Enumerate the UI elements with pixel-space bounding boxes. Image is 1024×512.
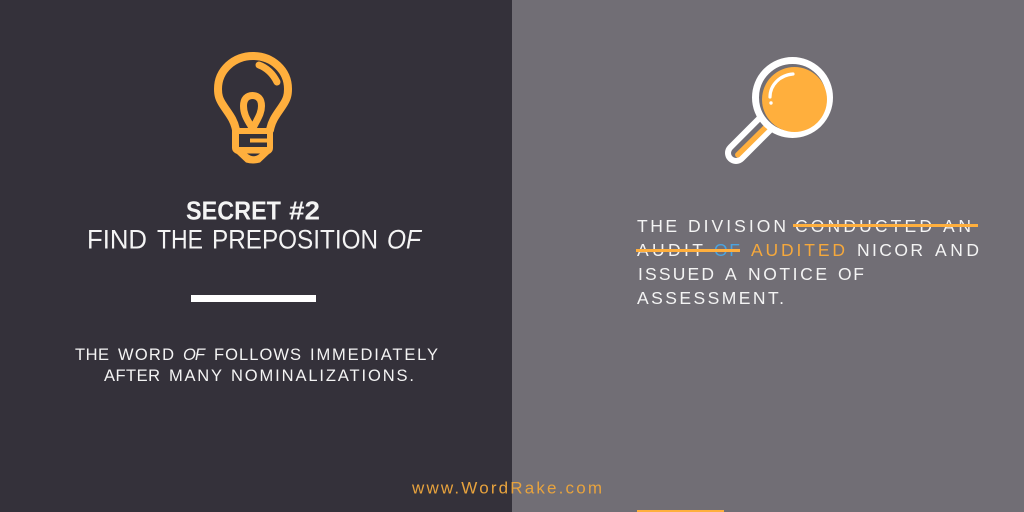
text block: example sentence with edits [637,216,979,308]
text block: example sentence with edits: ISSUED [638,264,714,284]
heading: find the preposition of: PREPOSITION [212,224,378,254]
text block: explanation: OF [183,346,206,364]
text block: explanation [75,346,438,385]
strikethrough: audit of [636,249,740,252]
heading: secret number: #2 [289,196,320,226]
heading: secret number: SECRET [186,196,281,226]
text block: example sentence with edits: THE [637,216,677,236]
text block: example sentence with edits: OF [838,264,864,284]
heading: find the preposition of [87,224,422,254]
text block: explanation: WORD [118,346,174,364]
text block: explanation: THE [75,346,109,364]
text block: explanation: IMMEDIATELY [310,346,438,364]
text block: example sentence with edits: OF [714,240,740,260]
text block: example sentence with edits: CONDUCTED [795,216,932,236]
heading: find the preposition of: THE [157,224,203,254]
text block: example sentence with edits: DIVISION [688,216,786,236]
text block: example sentence with edits: AUDITED [751,240,845,260]
text block: example sentence with edits: A [725,264,737,284]
text block: explanation: AFTER [104,367,160,385]
text block: example sentence with edits: AND [935,240,979,260]
footer website url: www.WordRake.com [411,478,602,498]
panel: right grey background [512,0,1024,512]
accent bar at bottom [637,510,724,512]
text block: example sentence with edits: NOTICE [748,264,827,284]
text block: explanation: FOLLOWS [214,346,301,364]
strikethrough: conducted an [793,224,978,227]
icon: magnifying glass [736,60,830,155]
heading: find the preposition of: OF [387,224,422,254]
divider bar [191,295,316,302]
text block: explanation: MANY [169,367,222,385]
text block: example sentence with edits: AUDIT [637,240,703,260]
text block: example sentence with edits: ASSESSMENT. [637,288,784,308]
text block: example sentence with edits: NICOR [857,240,923,260]
text block: explanation: NOMINALIZATIONS. [231,367,414,385]
icon: light bulb [218,56,288,164]
heading: find the preposition of: FIND [87,224,147,254]
text block: example sentence with edits: AN [943,216,971,236]
panel: left dark background [0,0,512,512]
